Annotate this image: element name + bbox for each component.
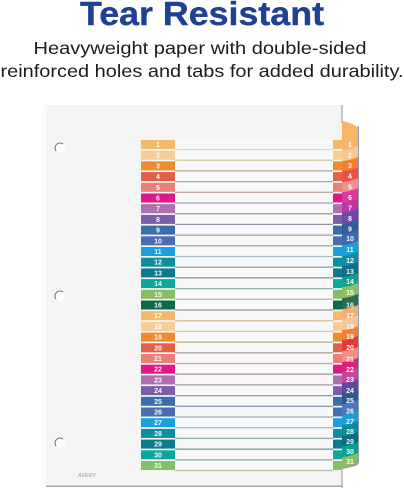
side tab numbers: 23 <box>346 377 354 384</box>
side tab numbers: 17 <box>346 313 354 320</box>
side tab numbers: 12 <box>346 258 354 265</box>
panel: divider page <box>42 105 359 488</box>
side tab 24 <box>342 379 358 403</box>
row 15 <box>141 290 342 299</box>
row 20 <box>141 343 342 353</box>
row 5 <box>141 183 342 192</box>
row 3 <box>141 161 342 171</box>
row 23 <box>141 375 342 385</box>
row 26: 26 <box>154 410 162 416</box>
side tab numbers: 9 <box>348 227 352 234</box>
side tab 28 <box>342 421 358 446</box>
side tab numbers: 22 <box>346 367 354 374</box>
row tabs <box>141 140 342 470</box>
logo: AVERY <box>77 473 96 479</box>
side tab numbers: 21 <box>346 356 354 364</box>
side tab 2 <box>342 146 358 170</box>
side tab numbers: 18 <box>346 324 354 331</box>
row 22 <box>141 365 342 374</box>
side tab 27 <box>342 411 358 435</box>
row 2 <box>141 151 342 160</box>
side tab numbers: 13 <box>346 269 354 276</box>
row 28 <box>141 429 342 438</box>
side tab numbers: 6 <box>348 195 352 202</box>
side tab edge <box>343 126 359 469</box>
side tab numbers: 31 <box>346 459 354 466</box>
side tab numbers: 3 <box>348 163 352 170</box>
side tab numbers: 7 <box>348 205 352 212</box>
row 11: 11 <box>154 249 162 256</box>
side tab 7 <box>342 199 358 223</box>
side tab numbers: 28 <box>346 429 354 436</box>
side tab numbers: 26 <box>346 408 354 416</box>
row 1: 1 <box>156 142 160 149</box>
side tab 23 <box>342 368 358 393</box>
side tab numbers: 19 <box>346 334 354 341</box>
row 28: 28 <box>154 431 162 438</box>
row 12: 12 <box>154 260 162 267</box>
side tab 13 <box>342 262 358 287</box>
row 13: 13 <box>154 270 162 277</box>
row 21 <box>141 354 342 364</box>
row 31: 31 <box>154 463 162 470</box>
side tab numbers: 11 <box>346 247 354 254</box>
row 18 <box>141 322 342 331</box>
side tab 22 <box>342 358 358 382</box>
side tab numbers: 8 <box>348 216 352 223</box>
row 29 <box>141 440 342 449</box>
side tab 5 <box>342 178 358 202</box>
subtitle: Heavyweight paper with double-sided <box>34 38 366 58</box>
side tabs <box>342 121 358 468</box>
row 16: 16 <box>154 302 162 310</box>
side tab 14 <box>342 273 358 297</box>
row 4 <box>141 172 342 182</box>
row 16 <box>141 300 342 310</box>
side tab numbers <box>346 142 354 466</box>
side tab numbers: 16 <box>346 302 354 310</box>
side tab 21 <box>342 347 358 371</box>
row 17 <box>141 311 342 321</box>
row 6 <box>141 194 342 203</box>
side tab 25 <box>342 389 358 414</box>
row 9 <box>141 226 342 235</box>
row 8: 8 <box>156 217 160 224</box>
row 27: 27 <box>154 420 162 427</box>
row 20: 20 <box>154 345 162 352</box>
subtitle <box>0 38 404 81</box>
row 4: 4 <box>156 174 160 181</box>
side tab 11 <box>342 241 358 265</box>
row 11 <box>141 247 342 256</box>
row 17: 17 <box>154 313 162 320</box>
side tab numbers: 15 <box>346 290 354 297</box>
side tab 20 <box>342 336 358 361</box>
row 26 <box>141 408 342 417</box>
side tab numbers: 4 <box>348 174 352 181</box>
row 21: 21 <box>154 356 162 363</box>
row 10 <box>141 236 342 246</box>
side tab 8 <box>342 209 358 234</box>
side tab 17 <box>342 305 358 329</box>
row 19: 19 <box>154 335 162 342</box>
subtitle: reinforced holes and tabs for added durability. <box>0 61 404 81</box>
side tab numbers: 20 <box>346 345 354 352</box>
row 30: 30 <box>154 452 162 459</box>
side tab 6 <box>342 188 358 213</box>
side tab 26 <box>342 400 358 424</box>
row 9: 9 <box>156 228 160 235</box>
side tab 4 <box>342 167 358 191</box>
row 8 <box>141 215 342 224</box>
side tab 12 <box>342 252 358 276</box>
side tab 30 <box>342 442 358 462</box>
row 6: 6 <box>156 196 160 202</box>
side tab numbers: 10 <box>346 236 354 243</box>
side tab 3 <box>342 157 358 181</box>
row 30 <box>141 450 342 460</box>
row 24 <box>141 386 342 396</box>
row 3: 3 <box>156 163 160 170</box>
hole 1 <box>55 143 65 153</box>
side tab 15 <box>342 283 358 308</box>
row 24: 24 <box>154 388 162 395</box>
side tab 9 <box>342 220 358 244</box>
side tab numbers: 27 <box>346 419 354 426</box>
row 27 <box>141 418 342 428</box>
row 7 <box>141 204 342 214</box>
row 23: 23 <box>154 377 162 384</box>
side tab numbers: 2 <box>348 153 352 160</box>
side tab numbers: 30 <box>346 449 354 456</box>
row 18: 18 <box>154 324 162 331</box>
side tab 16 <box>342 294 358 318</box>
side tab numbers: 1 <box>348 142 352 149</box>
row 31 <box>141 461 342 470</box>
row 14 <box>141 279 342 289</box>
side tab numbers: 29 <box>346 439 354 446</box>
row 1 <box>141 140 342 150</box>
row 29: 29 <box>154 442 162 449</box>
side tab 31 <box>342 453 358 468</box>
side tab 10 <box>342 230 358 255</box>
row 7: 7 <box>156 206 160 213</box>
page sheet <box>42 105 342 488</box>
row 13 <box>141 268 342 278</box>
row 19 <box>141 333 342 342</box>
row 12 <box>141 258 342 267</box>
side tab numbers: 14 <box>346 279 354 286</box>
hole 3 <box>55 438 65 448</box>
row 25 <box>141 397 342 406</box>
row 25: 25 <box>154 399 162 406</box>
row 14: 14 <box>154 281 162 288</box>
row 2: 2 <box>156 153 160 160</box>
row 22: 22 <box>154 367 162 374</box>
side tab 19 <box>342 326 358 350</box>
side tab 29 <box>342 432 358 456</box>
row 15: 15 <box>154 292 162 299</box>
hole 2 <box>55 291 65 301</box>
row 5: 5 <box>156 185 160 192</box>
side tab numbers: 25 <box>346 398 354 405</box>
side tab 18 <box>342 315 358 340</box>
side tab numbers: 5 <box>348 184 352 191</box>
side tab numbers: 24 <box>346 388 354 395</box>
side tab 1 <box>342 121 358 160</box>
row 10: 10 <box>154 238 162 245</box>
